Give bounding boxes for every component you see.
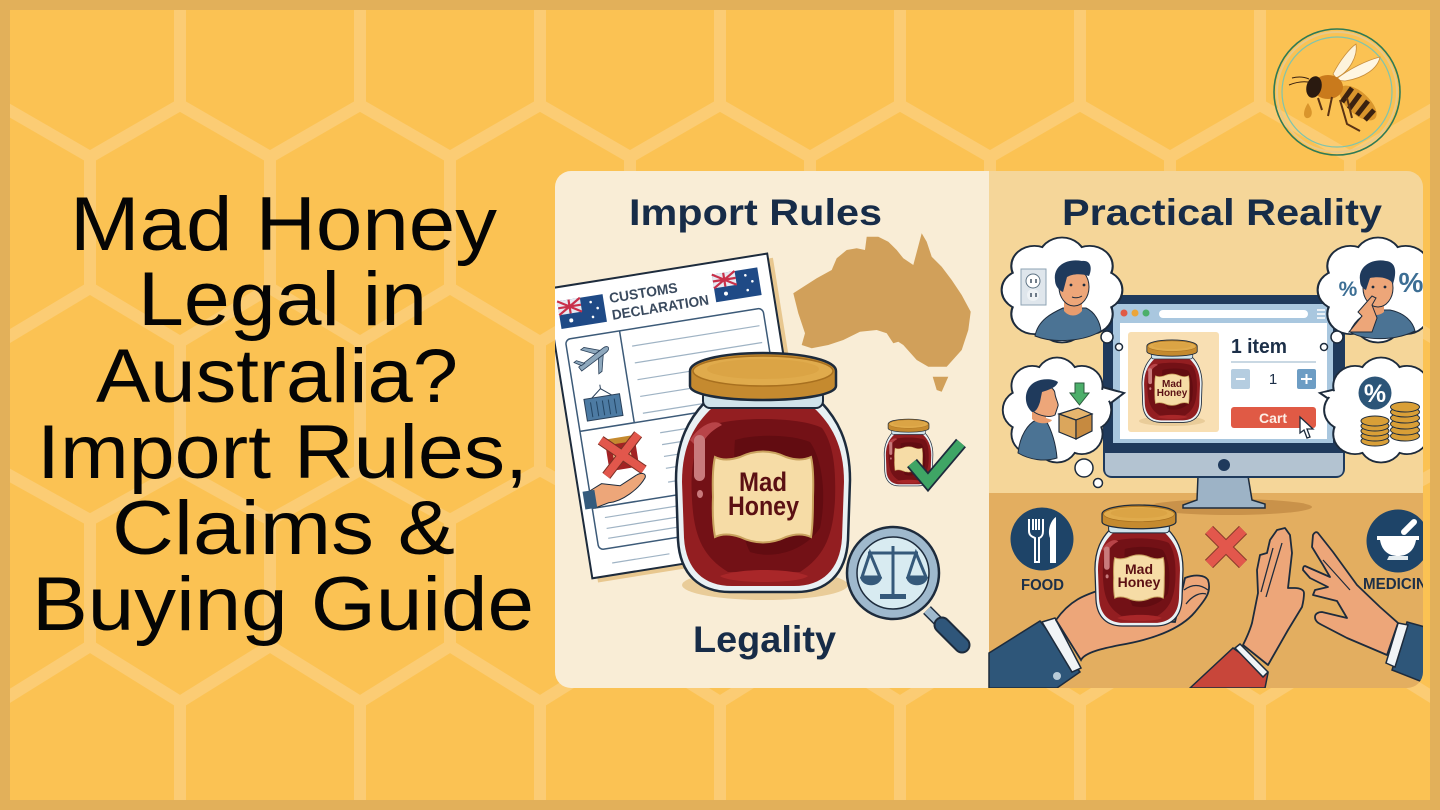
coin stacks <box>1361 402 1420 446</box>
person <box>1035 260 1101 341</box>
flag left <box>557 294 607 329</box>
heading: import rules: Import Rules <box>629 192 882 233</box>
person profile <box>1018 379 1058 460</box>
form title: DECLARATION <box>611 292 710 323</box>
food badge <box>1010 508 1074 594</box>
cart jar: Mad <box>1162 379 1182 390</box>
cursor <box>1300 417 1313 438</box>
title: Mad Honey <box>70 182 497 267</box>
person thinking <box>1349 260 1415 339</box>
icon: plane <box>573 346 609 374</box>
panel: practical reality background <box>989 171 1423 493</box>
product card <box>1128 332 1219 432</box>
monitor <box>1103 295 1345 515</box>
title: Claims & <box>112 486 455 571</box>
title: Import Rules, <box>37 410 528 495</box>
icon: prohibited jar <box>601 434 644 476</box>
percent signs: % <box>1339 278 1358 301</box>
icon: container <box>582 382 623 421</box>
icon: green down arrow <box>1070 383 1089 405</box>
icon: hand <box>581 473 649 510</box>
held jar: Honey <box>1118 574 1161 590</box>
icon: box <box>1059 408 1092 439</box>
quantity stepper <box>1231 369 1316 389</box>
cart jar <box>1139 340 1205 426</box>
magnifier with scales <box>847 527 962 645</box>
medicine badge <box>1363 510 1437 593</box>
jar label text <box>730 472 799 520</box>
form title: CUSTOMS <box>608 279 679 306</box>
illustration panel <box>546 171 1437 688</box>
cart button: Cart <box>1259 410 1287 426</box>
percent signs: % <box>1399 267 1424 298</box>
held jar: Mad <box>1125 561 1153 577</box>
title: Australia? <box>96 334 458 419</box>
percent signs <box>1339 272 1423 296</box>
jar label text: Mad <box>739 467 787 497</box>
refusing hand centre <box>1190 528 1304 688</box>
medicine badge: MEDICINE <box>1363 576 1437 593</box>
held jar <box>1095 505 1183 626</box>
food badge: FOOD <box>1021 577 1064 594</box>
speech bubble: discount coins <box>1320 358 1437 462</box>
heading: legality: Legality <box>693 619 836 660</box>
jar label text: Honey <box>728 491 799 521</box>
small approved jar with check mark <box>884 419 961 486</box>
panel: food or medicine background <box>989 493 1423 688</box>
heading: practical reality: Practical Reality <box>1062 192 1382 233</box>
thought bubble: power plug person <box>1003 238 1122 350</box>
logo: bee in circle <box>1274 29 1400 155</box>
form title <box>610 283 708 320</box>
quantity stepper: 1 <box>1269 371 1277 388</box>
speech bubble: delivery person <box>1004 358 1124 488</box>
title: Legal in <box>138 257 427 342</box>
form boxes and lines <box>565 308 770 564</box>
stand <box>1148 476 1312 515</box>
cart button <box>1231 407 1316 428</box>
red cross <box>1209 530 1243 564</box>
item count: 1 item <box>1231 336 1287 358</box>
cart jar: Honey <box>1157 388 1188 399</box>
title: Buying Guide <box>32 562 534 647</box>
refusing hand right <box>1303 532 1425 683</box>
percent badge: % <box>1364 380 1386 408</box>
map of Australia <box>793 233 971 392</box>
icon: wall outlet <box>1021 269 1046 305</box>
panel: legality background <box>555 171 989 688</box>
customs declaration form <box>555 252 788 582</box>
title <box>32 182 534 647</box>
thought bubble: percent person <box>1319 238 1437 350</box>
hand holding jar <box>989 505 1209 688</box>
large jar with shadow <box>676 353 850 600</box>
flag right <box>712 267 762 302</box>
